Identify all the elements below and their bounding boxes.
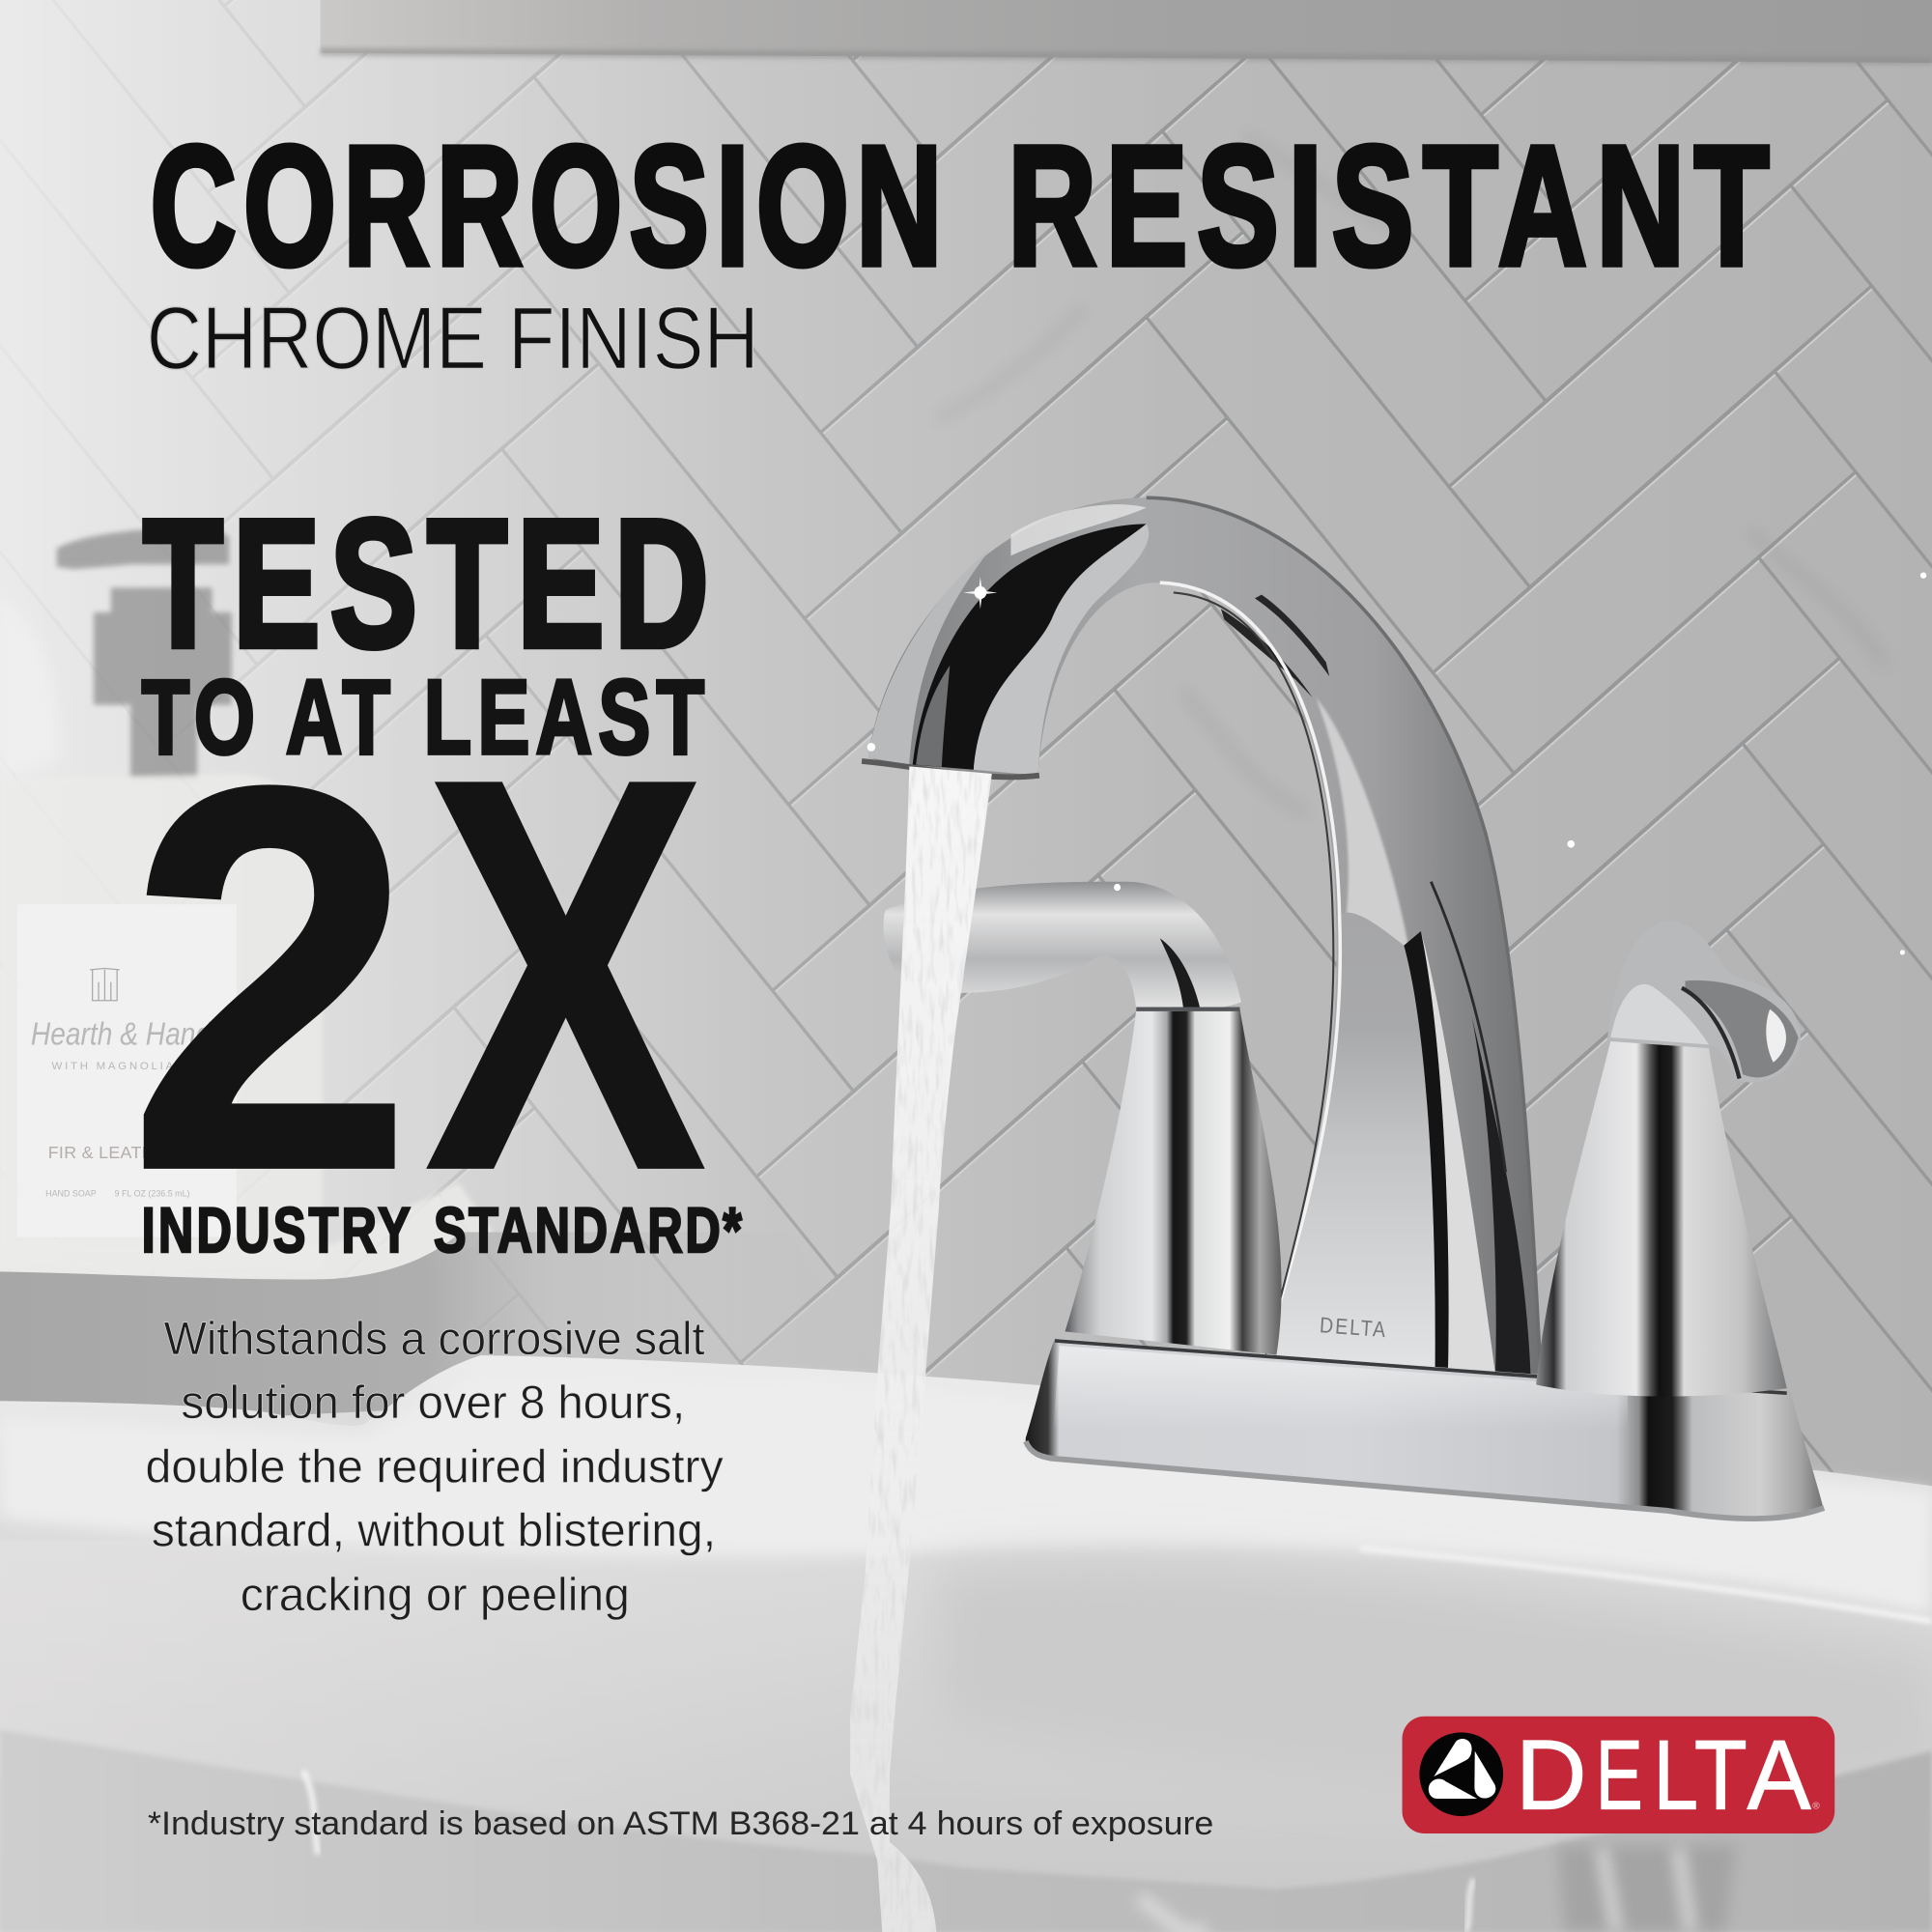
logo: Delta	[1403, 1717, 1834, 1833]
body text: solution for over 8 hours,	[182, 1377, 685, 1429]
headline: industry standard	[142, 1195, 742, 1266]
body text: standard, without blistering,	[152, 1505, 716, 1557]
wall sparkles	[1567, 572, 1926, 955]
big number 2: 2	[128, 675, 413, 1283]
title	[151, 110, 1769, 301]
faucet	[862, 497, 1824, 1519]
footnote: *Industry standard is based on ASTM B368-21 at 4 hours of exposure	[148, 1805, 1213, 1842]
right handle cone	[1536, 1041, 1787, 1397]
running water stream	[850, 766, 992, 1932]
title: CORROSION	[151, 111, 942, 301]
left handle cone	[1065, 1009, 1282, 1355]
spout body	[862, 497, 1541, 1378]
logo wordmark: D	[1516, 1719, 1587, 1830]
logo wordmark: T	[1694, 1720, 1747, 1831]
logo wordmark: E	[1596, 1720, 1643, 1830]
soap label text: Hearth & Hand	[31, 1017, 212, 1053]
headline line: to at least: TO AT LEAST	[142, 659, 704, 777]
soap label text: 9 FL OZ (236.5 mL)	[115, 1189, 190, 1199]
headline word: tested: TESTED	[143, 481, 709, 685]
body text: Withstands a corrosive salt	[164, 1313, 705, 1365]
specular star on nozzle	[867, 577, 997, 752]
soap label text	[31, 969, 212, 1199]
body text: cracking or peeling	[241, 1569, 630, 1621]
headline: industry standard: STANDARD*	[434, 1195, 742, 1266]
body text: double the required industry	[146, 1440, 724, 1492]
subtitle: CHROME FINISH	[147, 289, 759, 387]
title: RESISTANT	[1008, 110, 1769, 300]
big letter X: X	[425, 664, 708, 1286]
left handle lever	[883, 882, 1241, 1011]
soap label	[17, 904, 237, 1237]
right handle lever	[1607, 921, 1801, 1083]
headline: industry standard: INDUSTRY	[142, 1195, 411, 1266]
soap label text: FIR & LEATHER	[48, 1143, 181, 1162]
logo wordmark	[1516, 1719, 1811, 1831]
soap label text: WITH MAGNOLIA	[52, 1061, 175, 1072]
soap bottle	[0, 527, 323, 1269]
body text	[146, 1313, 724, 1621]
base plate	[1026, 1339, 1824, 1519]
top cabinet strip	[321, 0, 1932, 64]
soap label text: HAND SOAP	[45, 1189, 97, 1199]
DELTA mark on faucet: DELTA	[1319, 1314, 1387, 1343]
registered mark: ®	[1812, 1801, 1820, 1811]
logo wordmark: A	[1747, 1720, 1811, 1831]
logo wordmark: L	[1653, 1720, 1698, 1830]
sink basin	[0, 1355, 1932, 1932]
soap dish and shadow band	[0, 1182, 887, 1430]
logo icon	[1419, 1732, 1503, 1816]
headline: tested to at least 2X	[128, 481, 709, 1286]
